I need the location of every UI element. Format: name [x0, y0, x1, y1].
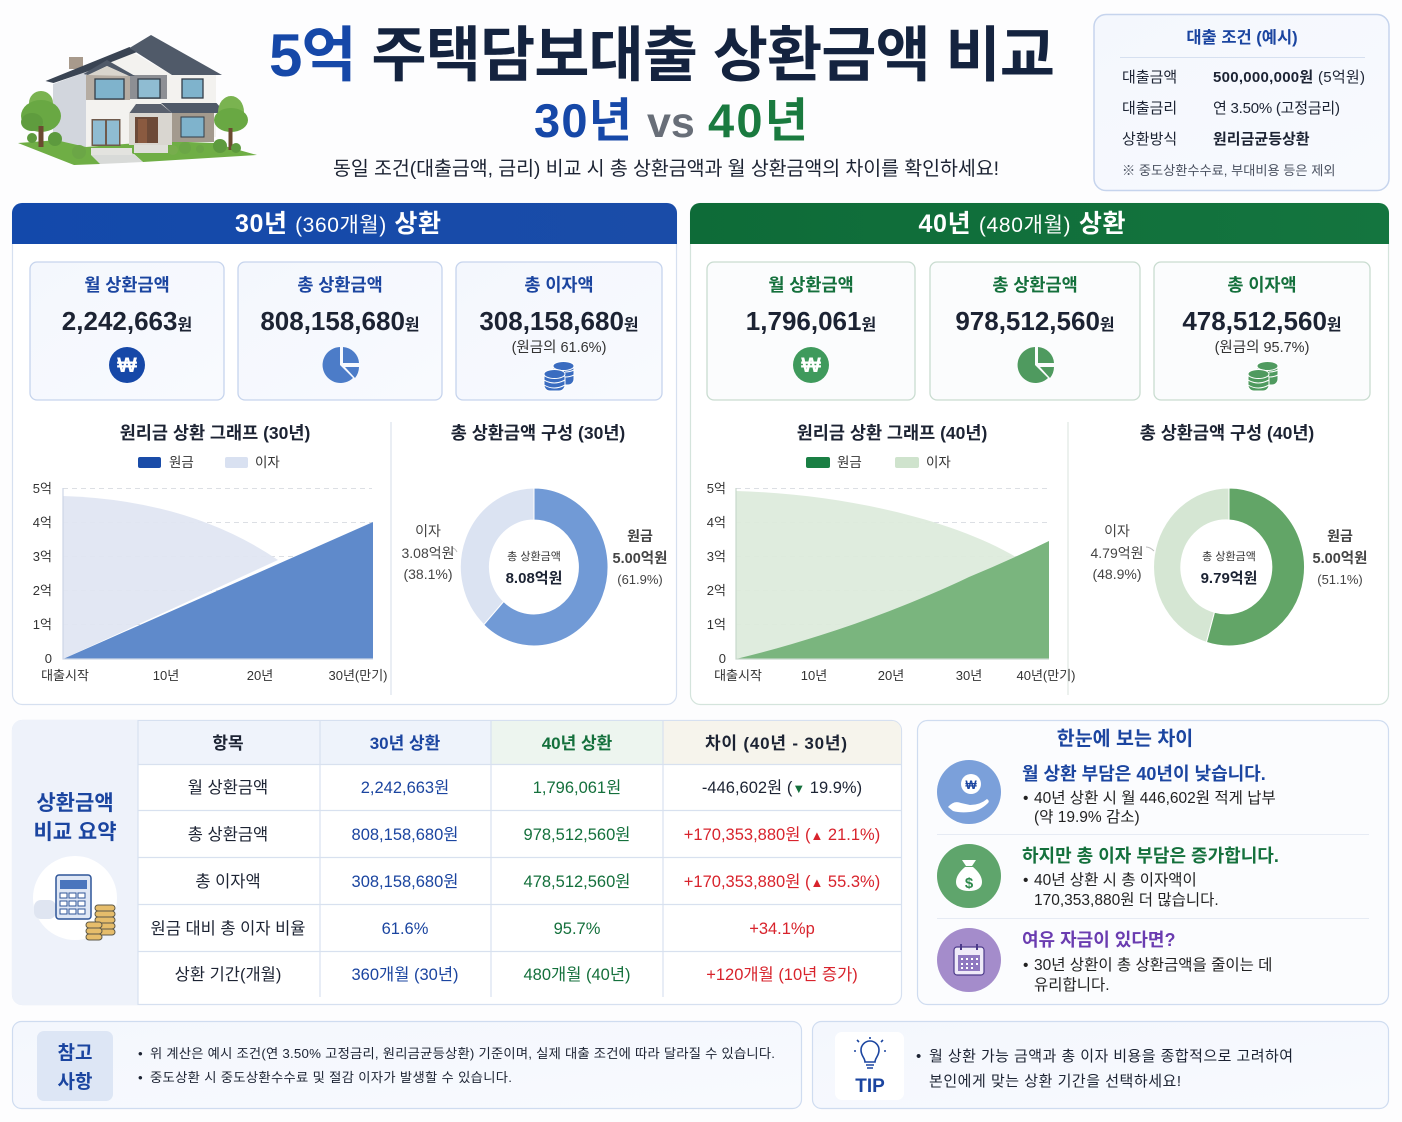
table header row: 항목 — [212, 734, 244, 753]
label interest: 3.08억원 — [401, 545, 455, 561]
label principal: 원금 — [627, 528, 653, 544]
donut chart 40: 9.79억원 — [1201, 570, 1257, 587]
condition rows: 상환방식 — [1122, 131, 1177, 148]
item: spare funds: 여유 자금이 있다면? — [1022, 930, 1175, 950]
area chart 40 — [707, 423, 1076, 683]
row: monthly: 2,242,663원 — [361, 778, 449, 797]
row: interest: 478,512,560원 — [524, 872, 630, 891]
row: interest: +170,353,880원 (▲ 55.3%) — [684, 872, 880, 891]
item: spare funds: • — [1023, 957, 1028, 974]
notes badge: 사항 — [58, 1071, 92, 1093]
donut chart 40 — [1090, 423, 1367, 646]
item: interest burden: 하지만 총 이자 부담은 증가합니다. — [1022, 846, 1279, 866]
notes text: • — [138, 1070, 143, 1085]
card: interest 30: 308,158,680원 — [479, 306, 639, 336]
card: monthly 30 — [30, 262, 224, 400]
label principal 40: 원금 — [1327, 528, 1353, 544]
card: interest 40: (원금의 95.7%) — [1215, 339, 1309, 356]
x axis labels — [41, 668, 388, 683]
x axis labels 40: 10년 — [801, 668, 827, 683]
area chart 40: 원리금 상환 그래프 (40년) — [797, 423, 987, 443]
condition rows: 대출금리 — [1122, 100, 1177, 117]
donut chart 40: 총 상환금액 — [1202, 550, 1256, 563]
tip badge — [835, 1032, 904, 1100]
item: spare funds: 30년 상환이 총 상환금액을 줄이는 데 — [1034, 956, 1272, 974]
tagline: 동일 조건(대출금액, 금리) 비교 시 총 상환금액과 월 상환금액의 차이를 확인하세요! — [333, 158, 999, 180]
x axis labels: 30년(만기) — [328, 668, 388, 683]
y axis labels: 3억 — [33, 549, 52, 564]
panel: differences at a glance — [918, 720, 1388, 1004]
card: monthly 30: 월 상환금액 — [84, 275, 170, 295]
panel: differences at a glance: 한눈에 보는 차이 — [1057, 728, 1193, 750]
icon: won coin — [109, 347, 145, 383]
notes text: • — [138, 1046, 143, 1061]
table side label: 비교 요약 — [33, 821, 117, 844]
icon: house illustration — [18, 35, 257, 165]
card: total 30 — [238, 262, 442, 400]
y axis labels: 4억 — [33, 515, 52, 530]
icon: won coin: ₩ — [117, 354, 137, 377]
label interest: (38.1%) — [403, 566, 453, 582]
area chart 30 — [33, 423, 388, 683]
label principal 40 — [1313, 528, 1367, 587]
icon: pie green — [1018, 347, 1054, 383]
subtitle: 30 vs 40: 30년 — [534, 94, 632, 147]
icon: pie — [323, 347, 359, 383]
x axis labels 40: 대출시작 — [714, 668, 762, 683]
row: period: +120개월 (10년 증가) — [706, 965, 858, 984]
item: monthly burden — [937, 760, 1276, 826]
card: interest 30 — [456, 262, 662, 400]
condition rows: 연 3.50% (고정금리) — [1213, 100, 1340, 117]
label principal — [613, 528, 667, 587]
header bar 40: 40년 (480개월) 상환 — [918, 210, 1126, 238]
item: spare funds — [937, 928, 1272, 994]
notes text: 중도상환 시 중도상환수수료 및 절감 이자가 발생할 수 있습니다. — [150, 1070, 512, 1085]
x axis labels 40: 30년 — [956, 668, 982, 683]
table side label — [12, 720, 138, 1005]
card: interest 40: 총 이자액 — [1227, 275, 1297, 295]
card: interest 40: 478,512,560원 — [1182, 306, 1342, 336]
card: monthly 30: 2,242,663원 — [62, 306, 192, 336]
y axis labels 40: 2억 — [707, 583, 726, 598]
label principal 40: (51.1%) — [1317, 572, 1363, 587]
item: interest burden: 40년 상환 시 총 이자액이 — [1034, 871, 1197, 889]
icon: hand with won coin: ₩ — [965, 778, 977, 792]
card: monthly 40: 월 상환금액 — [768, 275, 854, 295]
donut chart 30: 총 상환금액 구성 (30년) — [451, 423, 625, 443]
y axis labels 40: 3억 — [707, 549, 726, 564]
row: ratio — [151, 919, 815, 938]
item: monthly burden: 40년 상환 시 월 446,602원 적게 납부 — [1034, 789, 1276, 807]
card: interest 40 — [1154, 262, 1370, 400]
label principal: (61.9%) — [617, 572, 663, 587]
row: ratio: 61.6% — [382, 920, 429, 938]
y axis labels: 0 — [45, 651, 52, 666]
panel: notes — [12, 1022, 802, 1108]
card: total 30: 총 상환금액 — [297, 275, 383, 295]
tip text: 본인에게 맞는 상환 기간을 선택하세요! — [929, 1073, 1181, 1090]
label interest 40: 4.79억원 — [1090, 545, 1144, 561]
y axis labels: 1억 — [33, 617, 52, 632]
row: total: +170,353,880원 (▲ 21.1%) — [684, 825, 880, 844]
row: period: 상환 기간(개월) — [175, 965, 281, 984]
tip badge: TIP — [855, 1076, 885, 1097]
x axis labels 40: 20년 — [878, 668, 904, 683]
y axis labels: 2억 — [33, 583, 52, 598]
table header row: 30년 상환 — [370, 734, 441, 753]
subtitle: 30 vs 40: 40년 — [708, 94, 808, 147]
card: monthly 40 — [707, 262, 915, 400]
y axis labels — [33, 481, 52, 666]
panel: tip — [812, 1022, 1388, 1108]
item: interest burden: 170,353,880원 더 많습니다. — [1034, 891, 1219, 909]
table side label: 상환금액 — [36, 792, 114, 815]
donut chart 40: 총 상환금액 구성 (40년) — [1140, 423, 1314, 443]
title: 5억 주택담보대출 상환금액 비교 — [269, 22, 1055, 89]
donut chart 30: 8.08억원 — [506, 570, 562, 587]
notes badge — [37, 1031, 113, 1101]
row: total — [188, 825, 880, 844]
notes badge: 참고 — [58, 1042, 92, 1064]
icon: calculator and coins — [33, 856, 117, 940]
footnote: ※ 중도상환수수료, 부대비용 등은 제외 — [1122, 163, 1336, 178]
row: total: 808,158,680원 — [352, 825, 458, 844]
y axis labels 40: 0 — [719, 651, 726, 666]
row: monthly: 월 상환금액 — [188, 778, 268, 797]
row: period — [175, 965, 858, 984]
table header row: 차이 (40년 - 30년) — [705, 734, 847, 753]
panel: loan conditions: 대출 조건 (예시) — [1186, 28, 1298, 47]
row: interest: 308,158,680원 — [352, 872, 458, 891]
legend 30: 이자 — [255, 455, 280, 470]
panel: comparison table — [12, 720, 902, 1005]
card: interest 30: 총 이자액 — [524, 275, 594, 295]
row: monthly: -446,602원 (▼ 19.9%) — [702, 778, 862, 797]
card: total 40 — [930, 262, 1140, 400]
panel: loan conditions — [1094, 14, 1389, 190]
x axis labels 40 — [714, 668, 1076, 683]
row: period: 360개월 (30년) — [352, 965, 458, 984]
label interest — [401, 523, 455, 582]
condition rows — [1122, 69, 1365, 148]
row: monthly: 1,796,061원 — [533, 778, 621, 797]
icon: calendar — [937, 928, 1001, 992]
row: ratio: 원금 대비 총 이자 비율 — [151, 919, 305, 938]
y axis labels 40: 1억 — [707, 617, 726, 632]
table header row — [138, 721, 901, 764]
header bar 30: 30년 (360개월) 상환 — [235, 210, 441, 238]
item: monthly burden: (약 19.9% 감소) — [1034, 808, 1140, 826]
y axis labels 40: 4억 — [707, 515, 726, 530]
row: period: 480개월 (40년) — [524, 965, 630, 984]
icon: hand with won coin — [937, 760, 1001, 824]
subtitle: 30 vs 40 — [534, 94, 808, 147]
card: interest 30: (원금의 61.6%) — [512, 339, 606, 356]
card: total 40: 총 상환금액 — [992, 275, 1078, 295]
tip text — [916, 1048, 1293, 1090]
card: total 30: 808,158,680원 — [260, 306, 420, 336]
legend 40: 이자 — [926, 455, 951, 470]
icon: won coin green: ₩ — [801, 354, 821, 377]
icon: won coin green — [793, 347, 829, 383]
condition rows: 대출금액 — [1122, 69, 1177, 86]
donut chart 30: 총 상환금액 — [507, 550, 561, 563]
x axis labels: 대출시작 — [41, 668, 89, 683]
subtitle: 30 vs 40: vs — [647, 99, 695, 147]
row: ratio: +34.1%p — [749, 920, 815, 938]
label interest 40 — [1090, 523, 1144, 582]
panel: 30-year repayment — [12, 203, 677, 704]
legend 30: 원금 — [169, 455, 194, 470]
row: total: 978,512,560원 — [524, 825, 630, 844]
tip text: • — [916, 1048, 921, 1065]
row: interest — [195, 872, 880, 891]
x axis labels 40: 40년(만기) — [1016, 668, 1076, 683]
row: total: 총 상환금액 — [188, 825, 268, 844]
row: ratio: 95.7% — [554, 920, 601, 938]
icon: money bag — [937, 844, 1001, 908]
label principal: 5.00억원 — [613, 550, 667, 567]
header bar 40 — [690, 203, 1389, 244]
item: spare funds: 유리합니다. — [1034, 976, 1110, 994]
label principal 40: 5.00억원 — [1313, 550, 1367, 567]
legend 30 — [138, 455, 280, 470]
card: monthly 40: 1,796,061원 — [746, 306, 876, 336]
card: total 40: 978,512,560원 — [955, 306, 1115, 336]
x axis labels: 20년 — [247, 668, 273, 683]
panel: 40-year repayment — [690, 203, 1389, 704]
y axis labels 40 — [707, 481, 726, 666]
y axis labels 40: 5억 — [707, 481, 726, 496]
label interest: 이자 — [415, 523, 441, 539]
item: interest burden — [937, 844, 1279, 909]
legend 40 — [806, 455, 951, 470]
tip text: 월 상환 가능 금액과 총 이자 비용을 종합적으로 고려하여 — [929, 1048, 1293, 1065]
donut chart 30 — [401, 423, 667, 646]
notes text: 위 계산은 예시 조건(연 3.50% 고정금리, 원리금균등상환) 기준이며, 실제 대출 조건에 따라 달라질 수 있습니다. — [150, 1046, 775, 1061]
icon: coins green — [1248, 362, 1278, 391]
icon: light bulb — [854, 1037, 886, 1068]
row: monthly — [188, 778, 862, 797]
table header row: 40년 상환 — [542, 734, 613, 753]
area chart 30: 원리금 상환 그래프 (30년) — [120, 423, 310, 443]
condition rows: 원리금균등상환 — [1213, 131, 1310, 148]
y axis labels: 5억 — [33, 481, 52, 496]
notes text — [138, 1046, 775, 1085]
condition rows: 500,000,000원 (5억원) — [1213, 69, 1365, 86]
icon: coins — [544, 362, 574, 391]
label interest 40: (48.9%) — [1092, 566, 1142, 582]
header bar 30 — [12, 203, 677, 244]
x axis labels: 10년 — [153, 668, 179, 683]
item: interest burden: • — [1023, 872, 1028, 889]
legend 40: 원금 — [837, 455, 862, 470]
item: monthly burden: • — [1023, 790, 1028, 807]
row: interest: 총 이자액 — [195, 872, 261, 891]
icon: money bag: $ — [965, 875, 974, 892]
label interest 40: 이자 — [1104, 523, 1130, 539]
item: monthly burden: 월 상환 부담은 40년이 낮습니다. — [1022, 764, 1266, 784]
